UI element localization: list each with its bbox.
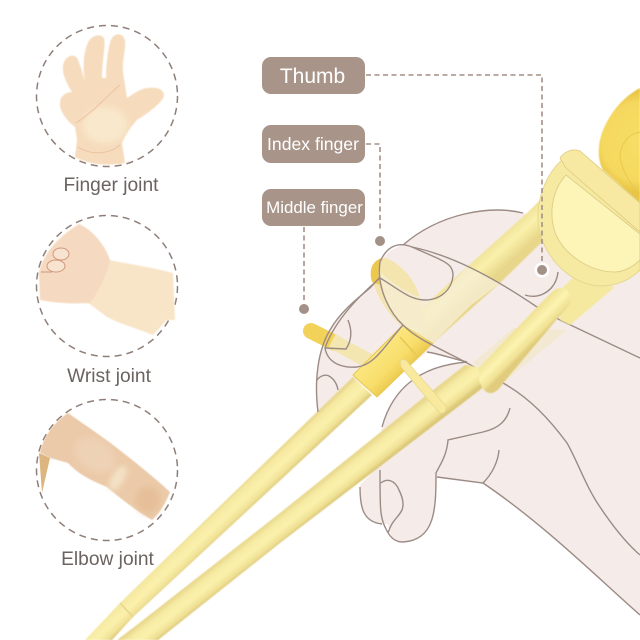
middle finger rest prong: [311, 331, 378, 366]
caption: Elbow joint: [61, 549, 155, 570]
peg on lower chopstick: [400, 360, 446, 413]
hand outlines: [316, 210, 640, 615]
callout: Middle finger: [262, 189, 365, 314]
yellow dome grip end: [599, 88, 640, 203]
arm joining grip: [560, 278, 615, 325]
thumb cuff: [479, 288, 571, 393]
callout: Middle finger: Middle finger: [266, 198, 363, 217]
panel: elbow joint: [36, 400, 178, 570]
panel: wrist joint: [36, 216, 178, 387]
hand silhouette background: [316, 210, 640, 615]
translucent finger overlay: [380, 267, 500, 343]
caption: Wrist joint: [67, 366, 152, 387]
chopstick upper: long stick with arm: [85, 200, 547, 640]
callout: Index finger: [262, 125, 385, 246]
icon: baby elbow: [39, 413, 170, 520]
icon: baby hand: [60, 34, 164, 165]
icon: baby wrist: [39, 224, 175, 335]
callout: Thumb: [262, 57, 550, 278]
pale band behind thumb cuff: [473, 328, 567, 383]
callout: Index finger: Index finger: [267, 134, 359, 154]
index finger rest prong: [371, 258, 428, 330]
chopstick lower: long stick: [117, 365, 500, 640]
caption: Finger joint: [64, 175, 159, 196]
panel: finger joint: [36, 26, 178, 196]
callout: Thumb: Thumb: [280, 65, 345, 88]
half-disc grip: [538, 150, 640, 286]
collar on chopstick: [353, 325, 433, 397]
